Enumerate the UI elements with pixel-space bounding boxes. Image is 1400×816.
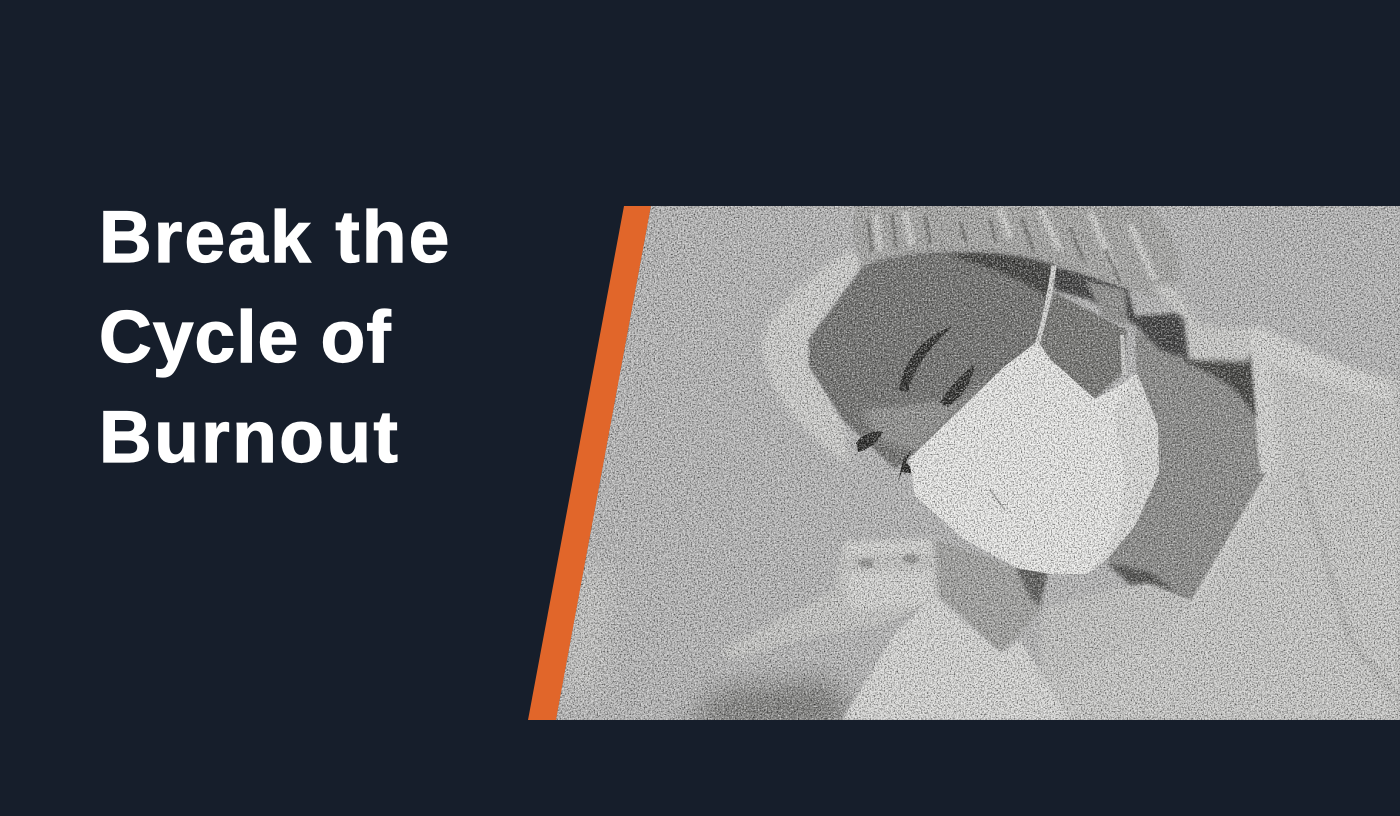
- title: Cycle of: [99, 297, 392, 378]
- nostril: [898, 449, 912, 482]
- orange accent bar: [528, 206, 651, 720]
- surgical cap: [762, 206, 1250, 465]
- title: [99, 197, 452, 478]
- ear: [1085, 280, 1128, 325]
- eyebrow: [899, 326, 953, 392]
- dark crease under mask: [1015, 566, 1048, 606]
- neck: [1107, 330, 1266, 601]
- photo: [540, 206, 1400, 730]
- lower left shadow: [680, 680, 860, 730]
- closed eye: [940, 364, 975, 407]
- photo panel with orange accent: [528, 206, 1400, 720]
- soft smudges at lower left: [560, 556, 608, 695]
- lower gown fold: [842, 596, 1070, 720]
- hair behind ear: [1054, 266, 1190, 360]
- face: [809, 252, 1127, 469]
- blurred hand and arm: [720, 539, 940, 660]
- photo background: [540, 206, 1400, 720]
- sleeve shaded strip: [935, 539, 1042, 653]
- photo grain: [540, 206, 1400, 720]
- far eye: [856, 431, 883, 452]
- gown: [1040, 326, 1400, 720]
- ear loops: [1038, 266, 1124, 375]
- title: Break the: [99, 197, 452, 278]
- title: Burnout: [99, 397, 400, 478]
- face mask: [909, 341, 1159, 574]
